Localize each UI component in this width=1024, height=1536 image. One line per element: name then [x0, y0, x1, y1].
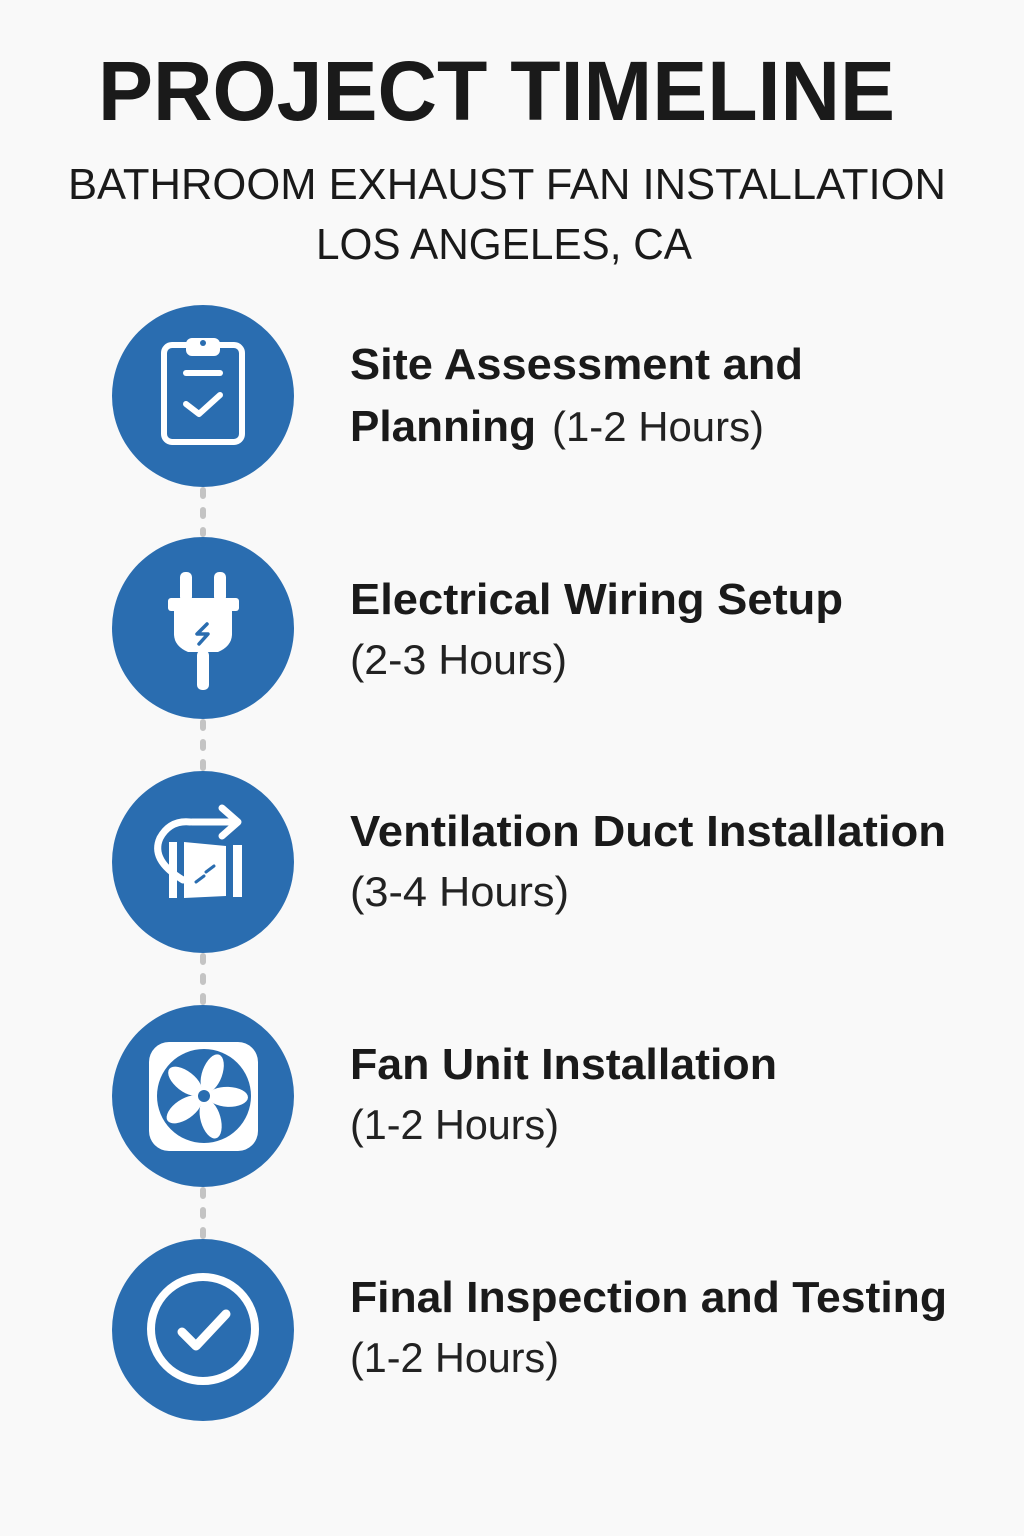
step 4 text: Fan Unit Installation	[350, 1040, 777, 1089]
timeline connectors	[200, 490, 206, 1236]
step 3 text: (3-4 Hours)	[350, 868, 569, 915]
step 1 text: Site Assessment and	[350, 340, 803, 389]
step 2: electrical	[112, 537, 843, 719]
subtitle	[68, 160, 946, 269]
subtitle: BATHROOM EXHAUST FAN INSTALLATION	[68, 160, 946, 209]
icon: fan	[112, 1005, 294, 1187]
step 4 text: (1-2 Hours)	[350, 1101, 559, 1148]
step 3 text: Ventilation Duct Installation	[350, 807, 946, 856]
icon: check circle	[112, 1239, 294, 1421]
step 1: site assessment	[112, 305, 803, 487]
step 2 text	[350, 575, 843, 683]
title: PROJECT TIMELINE	[98, 44, 895, 138]
step 5 text: Final Inspection and Testing	[350, 1273, 947, 1322]
icon: clipboard	[112, 305, 294, 487]
subtitle: LOS ANGELES, CA	[316, 220, 693, 269]
step 3: ventilation duct	[112, 771, 946, 953]
step 1 text	[350, 340, 803, 451]
step 3 text	[350, 807, 946, 915]
step 2 text: (2-3 Hours)	[350, 636, 567, 683]
step 1 text: Planning	[350, 402, 536, 451]
step 4 text	[350, 1040, 777, 1148]
step 4: fan unit	[112, 1005, 777, 1187]
step 5: final inspection	[112, 1239, 947, 1421]
icon: plug	[112, 537, 294, 719]
step 1 text: (1-2 Hours)	[552, 403, 764, 450]
step 5 text: (1-2 Hours)	[350, 1334, 559, 1381]
step 2 text: Electrical Wiring Setup	[350, 575, 843, 624]
icon: duct with arrow	[112, 771, 294, 953]
step 5 text	[350, 1273, 947, 1381]
